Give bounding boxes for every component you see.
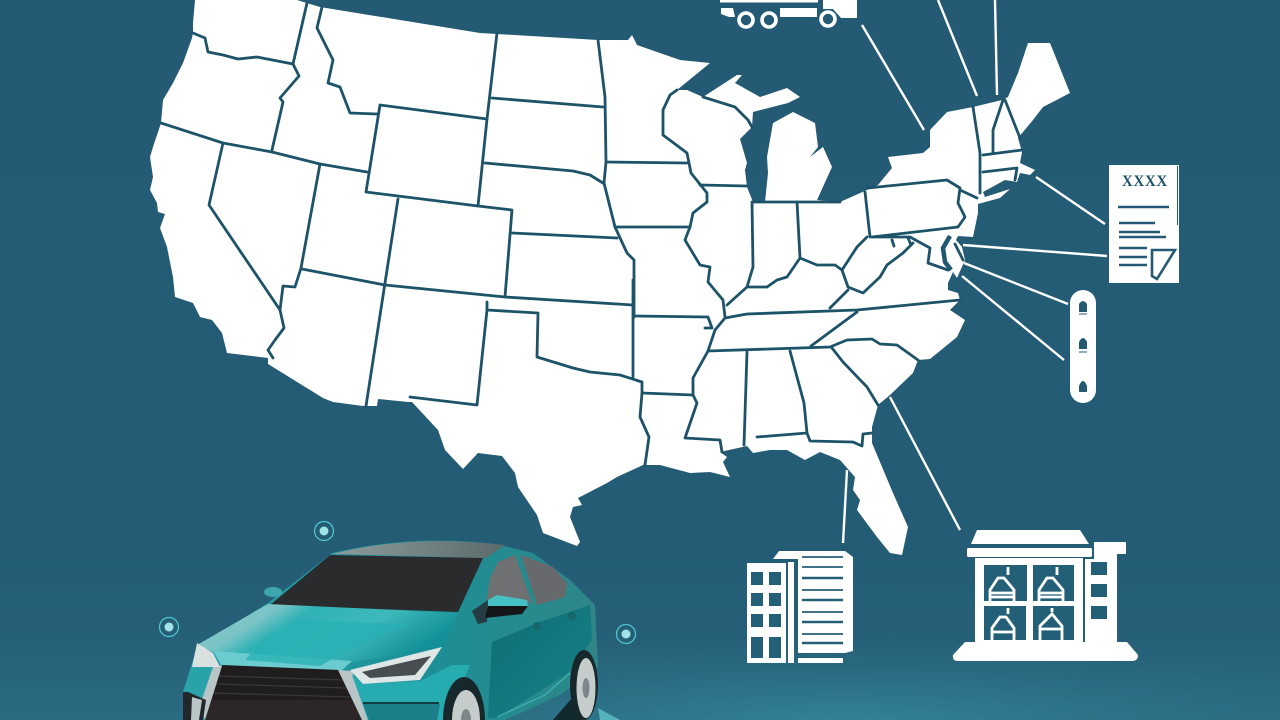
- bumper chrome: [200, 664, 368, 720]
- bottles on shelves: [990, 567, 1063, 640]
- icon: truck: [720, 0, 857, 27]
- left tower: [747, 563, 786, 663]
- wheel rear: [570, 650, 598, 720]
- icon: chain link: [1070, 290, 1096, 403]
- headlight right: [350, 647, 442, 684]
- pillar shadow: [472, 600, 488, 624]
- state borders: [161, 3, 1022, 465]
- narrow column: [788, 562, 794, 663]
- fog lamp left: [183, 692, 206, 720]
- wheel front: [443, 677, 485, 720]
- document page fold: [1152, 250, 1175, 279]
- car: [183, 540, 598, 720]
- headlight left: [192, 643, 220, 667]
- hood: [197, 604, 458, 662]
- floor glow: [0, 520, 1280, 720]
- map silhouette: [150, 0, 1070, 555]
- front grille: [205, 665, 362, 720]
- car body: [183, 540, 598, 720]
- plinth: [953, 642, 1138, 661]
- wing mirror left: [264, 587, 282, 597]
- document text lines: [1118, 207, 1169, 265]
- door panel shade: [488, 605, 592, 718]
- US map: [150, 0, 1070, 555]
- windshield: [270, 555, 483, 612]
- roof: [332, 541, 505, 558]
- icon: document: [1109, 165, 1179, 283]
- side windows: [487, 555, 532, 603]
- wing mirror right: [485, 595, 528, 618]
- front fascia: [213, 651, 352, 672]
- ledger sheet: [773, 551, 853, 653]
- icon: office building and ledger: [747, 551, 853, 663]
- icon: storefront warehouse: [953, 530, 1138, 661]
- lower body highlight: [497, 673, 570, 717]
- side tower: [1085, 542, 1126, 650]
- connector lines: [843, 0, 1107, 543]
- floor light streak: [598, 708, 620, 720]
- dark underbody: [553, 698, 582, 720]
- chesapeake bay: [943, 236, 951, 270]
- sensor badges: [160, 522, 636, 644]
- document heading: XXXX: [1122, 173, 1168, 190]
- bumper right: [352, 665, 470, 720]
- door handles: [533, 622, 541, 630]
